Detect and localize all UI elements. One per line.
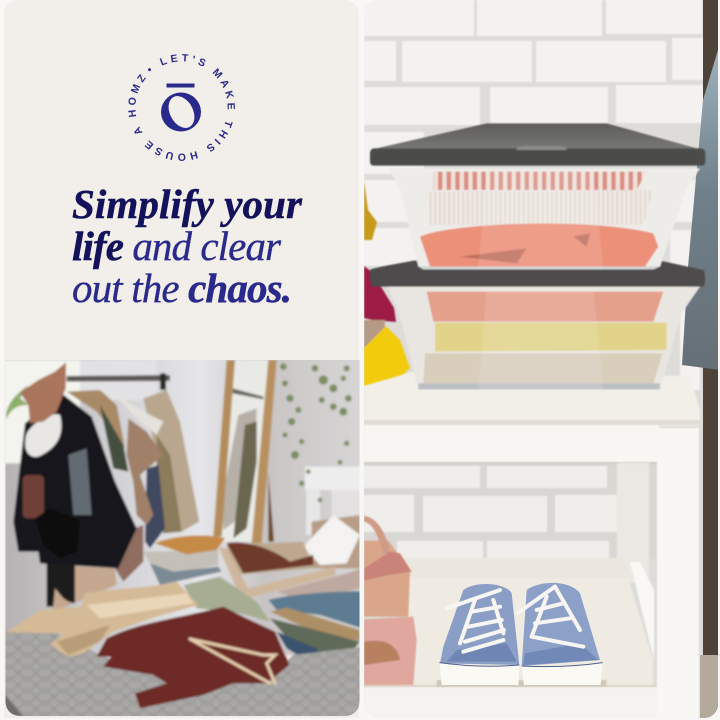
- cowboy hat: [20, 362, 66, 423]
- houseplant: [6, 385, 29, 420]
- lower bin: [370, 261, 705, 389]
- black handbag: [35, 508, 80, 558]
- hanging cloth and dark post: [682, 0, 720, 720]
- folded clothes at right: [268, 568, 362, 657]
- wooden hanger: [190, 639, 275, 683]
- rust jacket: [97, 607, 289, 708]
- logo: circular badge: [128, 54, 235, 161]
- logo mark: [161, 84, 201, 132]
- pink sandal: [364, 516, 417, 685]
- thermos bag: [23, 475, 44, 518]
- clothes rail: [67, 375, 170, 382]
- denim shirt: [68, 448, 92, 515]
- headline: [72, 181, 303, 311]
- cardboard box: [218, 515, 360, 600]
- right sneaker: [518, 583, 603, 685]
- mirror: [213, 360, 277, 543]
- white bag: [25, 414, 61, 457]
- photo: messy bedroom with clothes: [0, 355, 367, 720]
- headline line 1: Simplify your: [72, 181, 303, 227]
- logo ring text: • LET'S MAKE THIS HOUSE A HOMZ: [128, 54, 235, 161]
- white side table: [305, 467, 363, 535]
- black jacket: [13, 393, 137, 568]
- bed: [0, 632, 365, 720]
- blue sneakers: [437, 583, 607, 687]
- white shelf unit: [364, 372, 700, 720]
- left sneaker: [439, 584, 519, 685]
- hanging clothes: [53, 390, 199, 612]
- wall: [0, 355, 367, 655]
- sage shirt: [183, 577, 270, 622]
- upper bin: [388, 168, 700, 269]
- upper lid: [370, 123, 705, 166]
- panel: headline card: [4, 0, 359, 718]
- beige dress: [7, 582, 198, 657]
- window: [0, 360, 80, 463]
- trailing ivy: [280, 363, 352, 502]
- shoe shadow: [437, 680, 607, 687]
- brick wall background: [364, 0, 720, 720]
- headline line 2: life and clear: [72, 223, 282, 269]
- photo: storage bins on white shelf: [364, 0, 720, 720]
- headline line 3: out the chaos.: [72, 265, 292, 311]
- knit objects on the left: [364, 180, 410, 386]
- folded clothes stack: [143, 536, 225, 585]
- storage bins: [370, 123, 705, 389]
